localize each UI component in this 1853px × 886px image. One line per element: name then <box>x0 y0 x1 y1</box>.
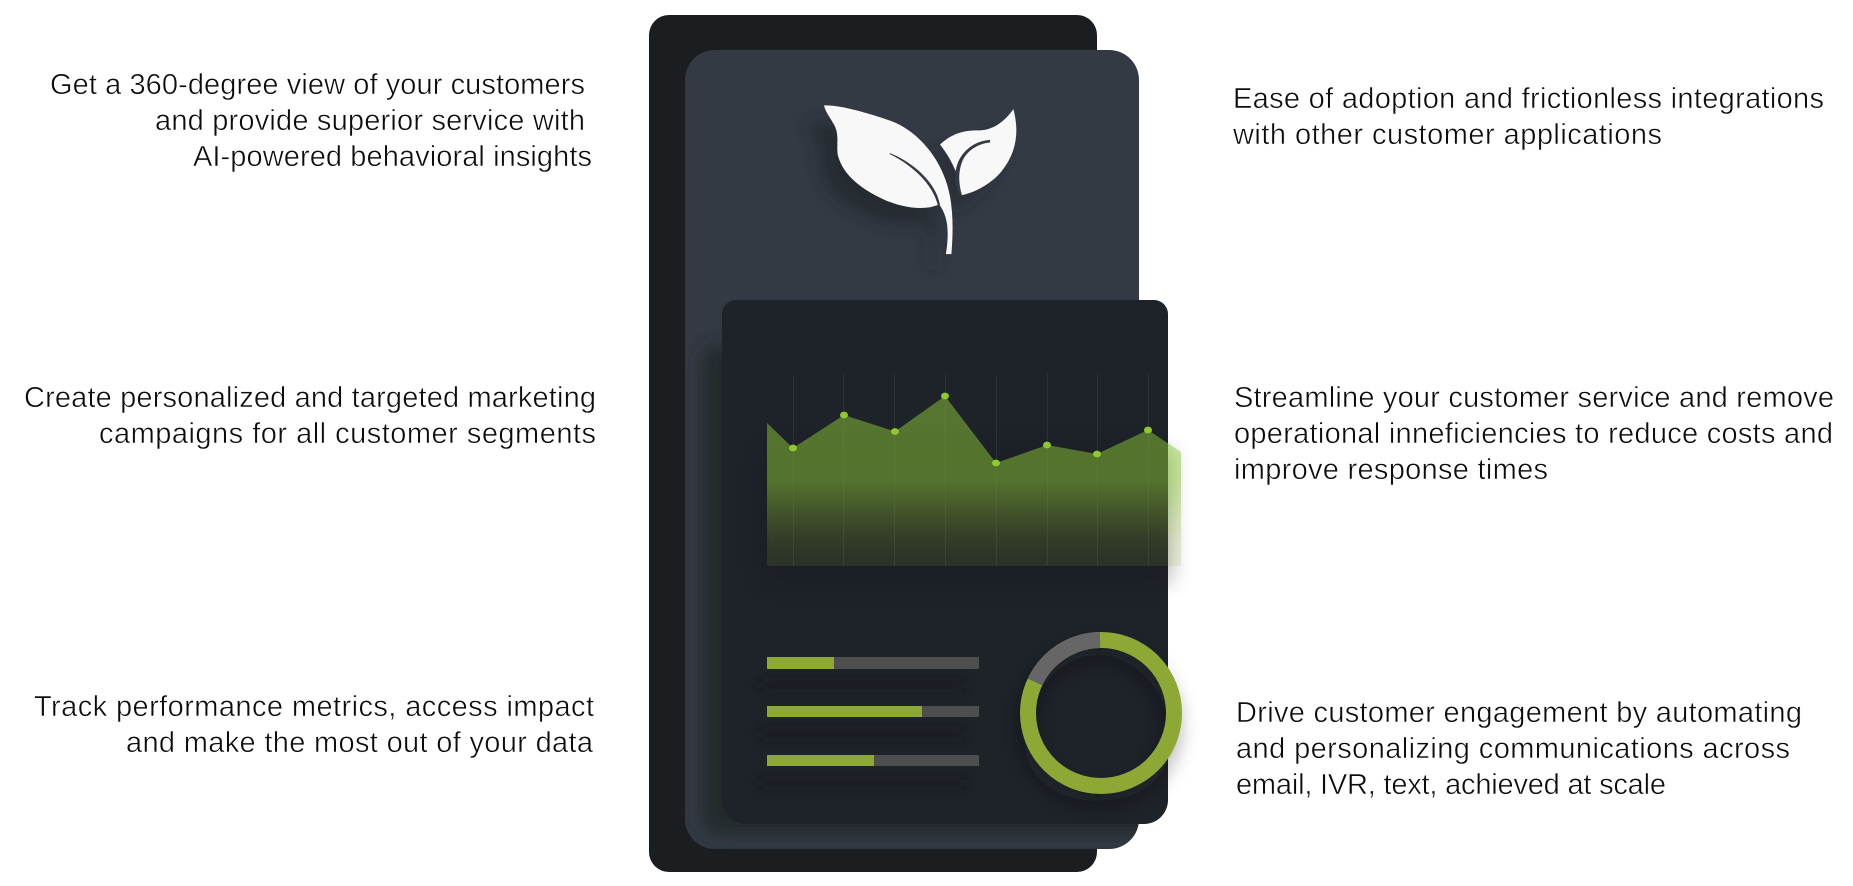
grid lines <box>794 373 1148 566</box>
text block: performance metrics <box>34 691 594 759</box>
text block: 360-degree view: and provide superior service with <box>155 105 585 137</box>
progress bars <box>760 657 979 787</box>
panel: front dashboard card <box>722 300 1168 824</box>
data points <box>789 393 1152 466</box>
area chart <box>762 373 1181 582</box>
panel: middle card <box>685 50 1139 849</box>
text block: streamline service <box>1234 382 1834 486</box>
text block: 360-degree view: AI-powered behavioral insights <box>193 141 592 173</box>
text block: ease of adoption <box>1232 83 1824 151</box>
big leaf vein <box>890 153 940 205</box>
donut shadow <box>1025 652 1171 798</box>
text block: customer engagement: and personalizing communications across <box>1236 733 1790 765</box>
text block: performance metrics: and make the most out of your data <box>126 727 594 759</box>
bar 2 <box>767 706 979 717</box>
area fill <box>767 396 1181 566</box>
text block: customer engagement: email, IVR, text, achieved at scale <box>1236 769 1666 801</box>
big leaf <box>824 105 953 254</box>
text block: customer engagement <box>1236 697 1802 801</box>
bar shadows <box>760 681 965 787</box>
text block: streamline service: improve response times <box>1234 454 1548 486</box>
text block: ease of adoption: with other customer applications <box>1232 119 1662 151</box>
front card shadow <box>702 345 1172 835</box>
text block: ease of adoption: Ease of adoption and frictionless integrations <box>1233 83 1824 115</box>
bar 3 <box>767 755 979 766</box>
text block: 360-degree view <box>50 69 592 173</box>
donut chart <box>1025 640 1174 798</box>
text block: 360-degree view: Get a 360-degree view of your customers <box>50 69 585 101</box>
icon: leaf sprout <box>808 105 1016 270</box>
text block: streamline service: operational inneficiencies to reduce costs and <box>1234 418 1833 450</box>
donut green track <box>1028 640 1174 786</box>
text block: personalized marketing <box>24 382 596 450</box>
text block: customer engagement: Drive customer engagement by automating <box>1236 697 1802 729</box>
donut grey segment <box>1035 640 1100 682</box>
panel: back card <box>649 15 1097 872</box>
chart shadow <box>762 450 1172 582</box>
text block: personalized marketing: campaigns for all customer segments <box>99 418 596 450</box>
text block: streamline service: Streamline your customer service and remove <box>1234 382 1834 414</box>
text block: performance metrics: Track performance metrics, access impact <box>34 691 594 723</box>
text block: personalized marketing: Create personalized and targeted marketing <box>24 382 596 414</box>
bar 1 <box>767 657 979 669</box>
small leaf <box>940 109 1016 195</box>
icon shadow <box>808 122 1000 270</box>
small leaf vein <box>955 140 990 196</box>
